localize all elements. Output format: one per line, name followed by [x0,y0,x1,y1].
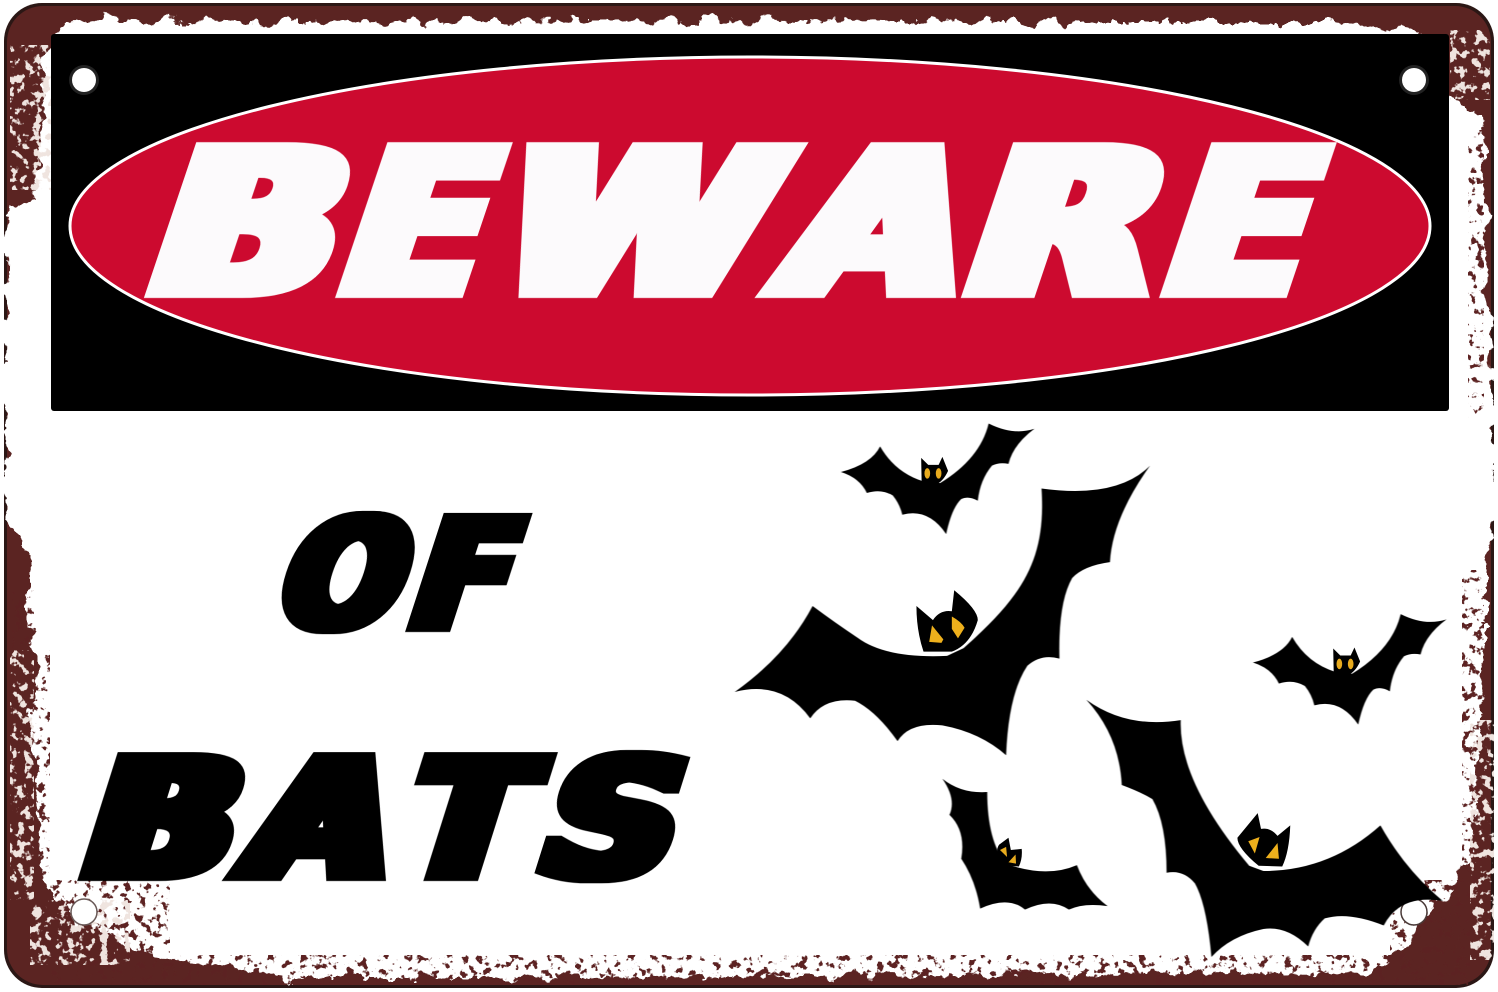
header panel [51,34,1449,411]
black band [51,34,1449,411]
icon: top small bat [841,424,1034,534]
heading: BEWARE [122,108,1353,341]
bat illustrations [735,424,1446,957]
text: OF: F [392,488,543,664]
heading: BEWARE: R [939,108,1201,341]
icon: large centre bat [735,466,1150,755]
mounting holes [69,65,1429,925]
icon: right small bat [1253,614,1446,725]
text: BATS [63,724,709,915]
text: BATS: T [384,726,555,915]
heading: BEWARE: A [755,108,1005,341]
heading: BEWARE: B [122,108,383,341]
icon: large lower right bat [1086,700,1443,957]
heading: BEWARE: E [1138,108,1353,341]
red oval [70,57,1430,395]
text: BATS: B [63,725,269,915]
heading: BEWARE: W [469,108,812,341]
text: OF: O [259,488,435,664]
heading: BEWARE: E [314,108,529,341]
text: BATS: A [225,724,421,915]
text: BATS: S [520,725,709,915]
icon: lower middle bat [942,779,1108,910]
text: OF [259,488,543,664]
